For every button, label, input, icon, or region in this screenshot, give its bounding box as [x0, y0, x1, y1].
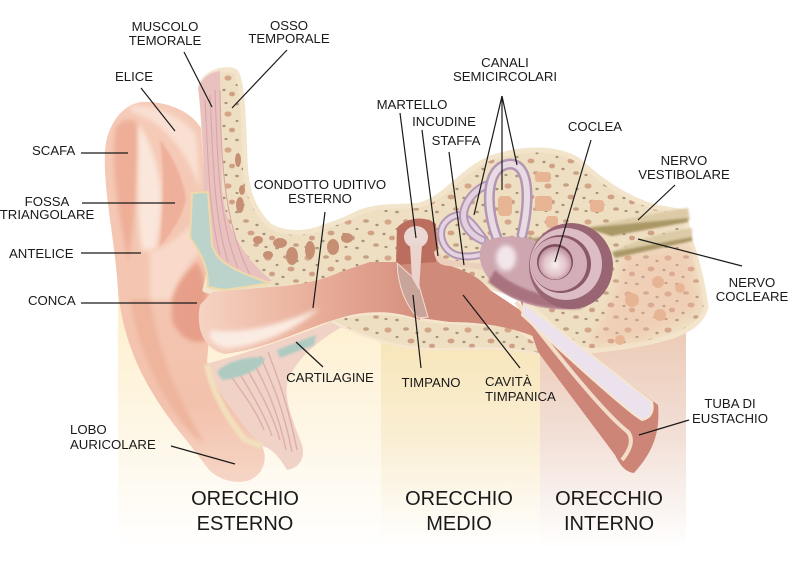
labels: TEMORALE: [129, 33, 201, 48]
bone marrow blotches: [235, 153, 353, 265]
labels: NERVO: [729, 275, 775, 290]
heading: orecchio medio: [405, 488, 513, 535]
labels: TRIANGOLARE: [0, 207, 94, 222]
labels: TIMPANO: [401, 375, 461, 390]
lower cartilage, striped tail: [205, 316, 345, 470]
labels: ESTERNO: [288, 191, 352, 206]
ear canal: [199, 262, 430, 354]
panel: orecchio medio background: [381, 320, 540, 548]
outer ear illustration: [105, 102, 265, 482]
labels: VESTIBOLARE: [638, 167, 730, 182]
heading: orecchio medio: MEDIO: [426, 513, 492, 535]
labels: ELICE: [115, 69, 153, 84]
eustachian tube: [516, 300, 658, 473]
labels: AURICOLARE: [70, 437, 156, 452]
labels: INCUDINE: [412, 114, 476, 129]
labels: CONDOTTO UDITIVO: [254, 177, 386, 192]
labels: NERVO: [661, 153, 707, 168]
labels: CARTILAGINE: [286, 370, 374, 385]
labels: MARTELLO: [377, 97, 447, 112]
upper cartilage: [190, 192, 270, 290]
labels: FOSSA: [25, 194, 70, 209]
heading: orecchio esterno: ORECCHIO: [191, 488, 299, 510]
heading: orecchio esterno: ESTERNO: [197, 513, 293, 535]
ossicles: [404, 226, 482, 290]
labels: COCLEARE: [716, 289, 788, 304]
labels: MUSCOLO: [132, 19, 198, 34]
labels: LOBO: [70, 422, 107, 437]
labels: CANALI: [481, 55, 529, 70]
panel: orecchio esterno background: [118, 290, 381, 548]
labels: TIMPANICA: [485, 389, 556, 404]
tympanic cavity: [396, 219, 560, 350]
labels: CAVITÀ: [485, 374, 532, 389]
labels: TUBA DI: [704, 396, 756, 411]
panel: orecchio interno background: [540, 320, 686, 548]
labels: STAFFA: [432, 133, 481, 148]
labels: OSSO: [270, 18, 308, 33]
labels: SEMICIRCOLARI: [453, 69, 557, 84]
heading: orecchio interno: ORECCHIO: [555, 488, 663, 510]
bottom bone band: [330, 314, 545, 354]
semicircular canals: [441, 164, 527, 256]
labels: CONCA: [28, 293, 76, 308]
labels: COCLEA: [568, 119, 622, 134]
labels: TEMPORALE: [248, 31, 330, 46]
labels: SCAFA: [32, 143, 75, 158]
nerves: [498, 208, 692, 264]
temporal muscle: [198, 71, 272, 286]
labels: ANTELICE: [9, 246, 74, 261]
bone: [201, 70, 706, 351]
labels: [0, 18, 788, 452]
leader lines: [81, 50, 742, 464]
vestibule and cochlea: [480, 223, 613, 309]
eardrum: [397, 263, 428, 318]
heading: orecchio interno: [555, 488, 663, 535]
labels: EUSTACHIO: [692, 411, 768, 426]
heading: orecchio medio: ORECCHIO: [405, 488, 513, 510]
heading: orecchio interno: INTERNO: [564, 513, 654, 535]
heading: orecchio esterno: [191, 488, 299, 535]
